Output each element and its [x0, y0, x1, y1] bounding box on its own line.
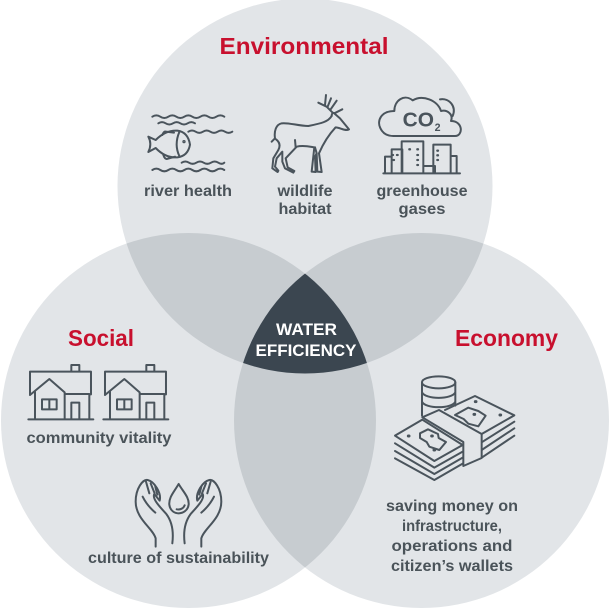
- heading: Social: Social: [68, 325, 134, 351]
- label: saving money text: citizen’s wallets: [391, 558, 513, 575]
- icon: CO2 cloud and city: CO: [403, 109, 434, 132]
- overlap: environmental and social: [126, 233, 304, 363]
- label: river health: river health: [144, 183, 232, 200]
- label: greenhouse gases: gases: [398, 201, 446, 218]
- label: wildlife habitat: wildlife: [276, 183, 333, 200]
- circle: economy: [234, 233, 609, 608]
- label: greenhouse gases: [376, 183, 468, 218]
- icon: river and fish: [148, 115, 232, 171]
- icon: CO2 cloud and city: [379, 98, 461, 173]
- circle: social: [1, 233, 376, 608]
- label: community vitality: community vitality: [26, 430, 172, 447]
- label: greenhouse gases: greenhouse: [376, 183, 468, 200]
- overlap: social and economy: [234, 363, 376, 568]
- label: saving money text: saving money on: [386, 498, 518, 515]
- label: saving money text: [386, 498, 518, 575]
- icon: CO2 cloud and city: 2: [435, 122, 441, 134]
- center label: WATER: [276, 321, 337, 339]
- label: saving money text: operations and: [392, 538, 512, 555]
- heading: Economy: Economy: [455, 325, 558, 351]
- icon: deer: [272, 95, 349, 173]
- icon: hands and water drop: [136, 480, 221, 547]
- overlap: environmental and economy: [306, 233, 484, 363]
- center label: EFFICIENCY: [256, 342, 356, 360]
- label: saving money text: infrastructure,: [402, 518, 502, 535]
- label: wildlife habitat: habitat: [278, 201, 332, 218]
- center: water efficiency region: [243, 274, 367, 374]
- label: wildlife habitat: [276, 183, 333, 218]
- heading: Environmental: Environmental: [220, 33, 388, 59]
- icon: money stack and coins: [395, 376, 514, 480]
- center label: [256, 321, 356, 360]
- label: culture of sustainability: culture of sustainability: [88, 550, 269, 567]
- icon: houses: [28, 365, 168, 419]
- circle: environmental: [118, 0, 492, 374]
